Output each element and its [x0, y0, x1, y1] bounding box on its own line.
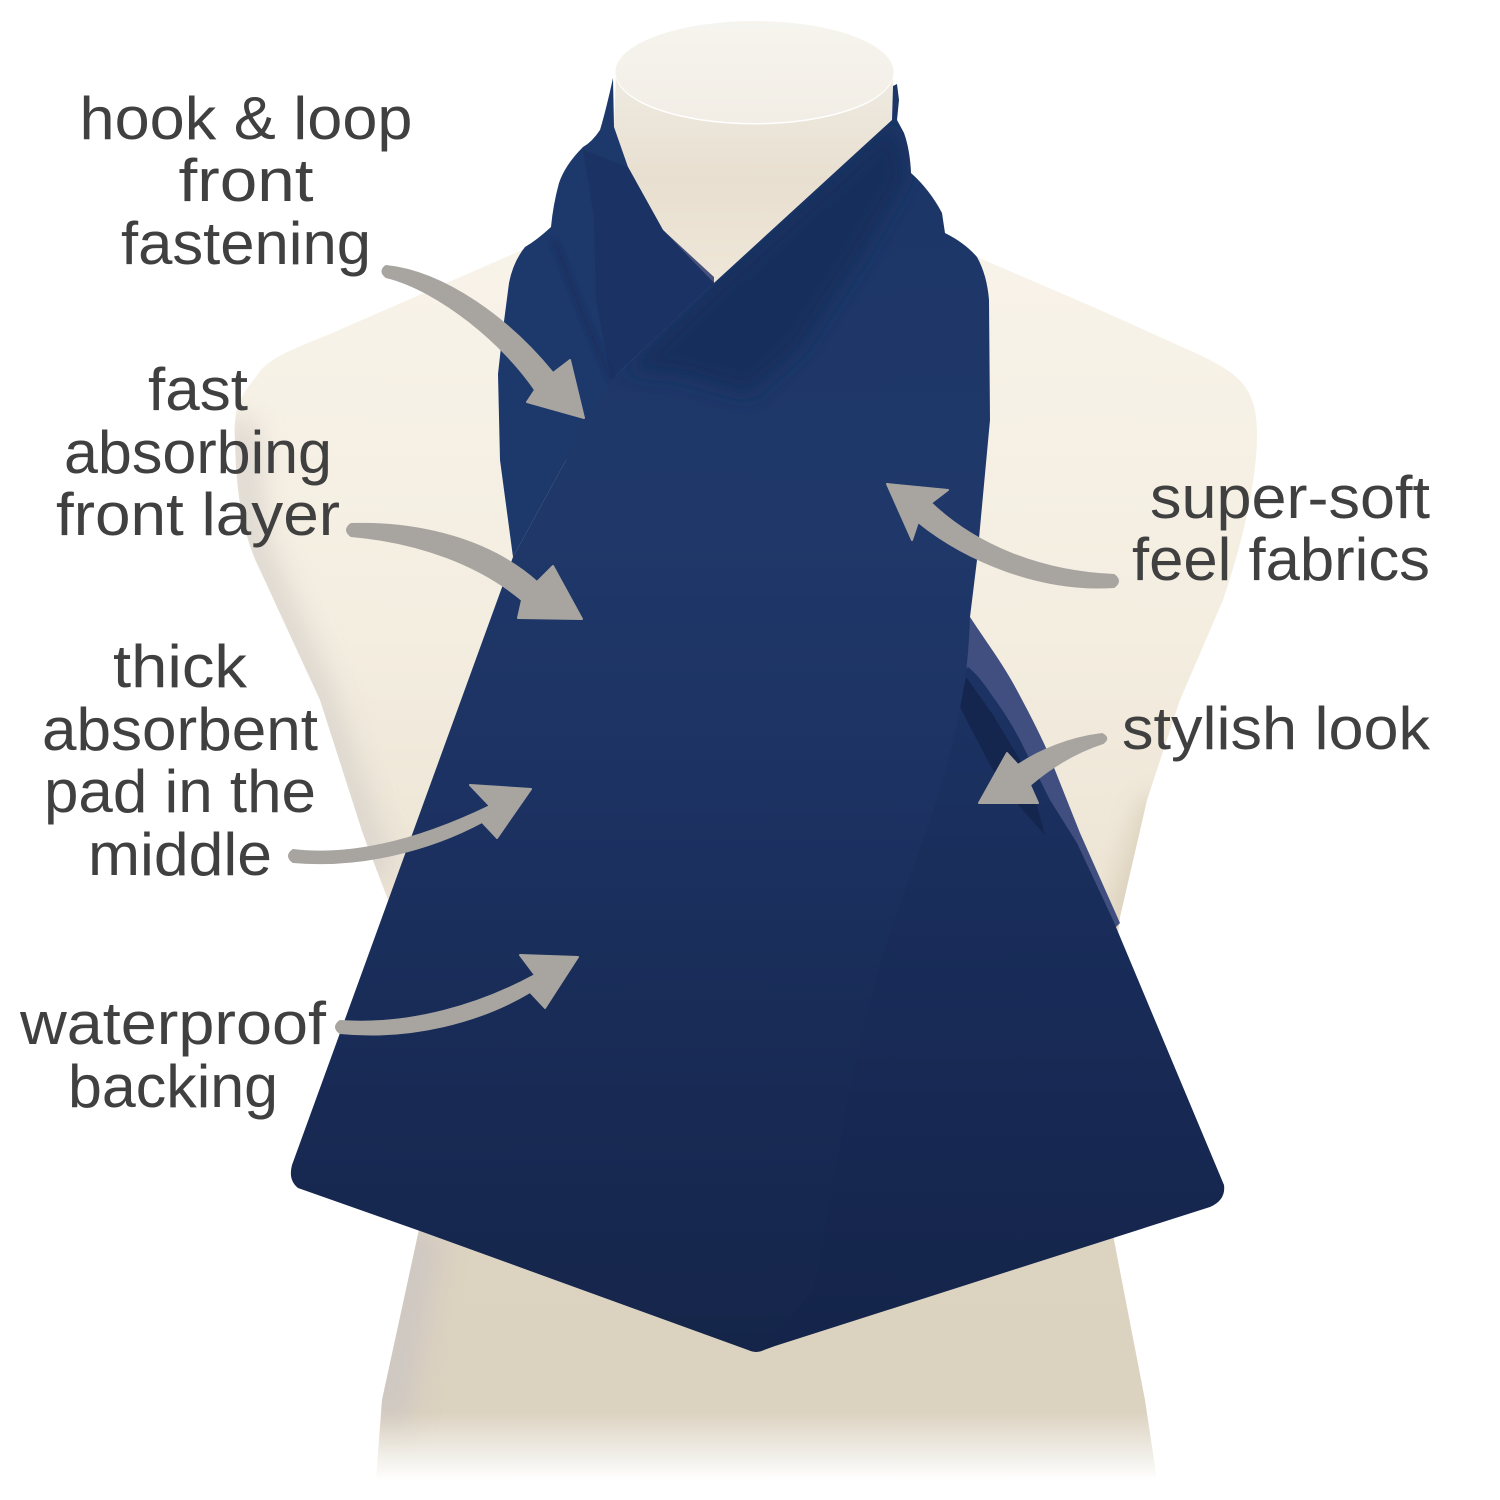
label: hook and loop front fastening: fastening — [121, 210, 371, 277]
arrow: front layer — [347, 524, 582, 619]
label: hook and loop front fastening: hook & loop — [80, 85, 412, 152]
arrow: stylish look — [979, 734, 1106, 803]
label: waterproof backing — [19, 990, 326, 1120]
arrow: waterproof — [336, 955, 578, 1035]
label: waterproof backing: waterproof — [19, 990, 326, 1057]
scarf lining — [655, 230, 1120, 930]
label: fast absorbing front layer — [56, 356, 340, 548]
label: hook and loop front fastening — [80, 85, 412, 277]
arrow: absorbent pad — [289, 785, 531, 863]
label: fast absorbing front layer: absorbing — [64, 419, 332, 486]
label: thick absorbent pad in the middle: middle — [88, 821, 272, 888]
scarf back right panel — [764, 667, 1224, 1350]
label: super-soft feel fabrics: feel fabrics — [1132, 526, 1430, 593]
label: stylish look: stylish look — [1122, 695, 1431, 762]
label: thick absorbent pad in the middle: pad in the — [44, 758, 316, 825]
label: hook and loop front fastening: front — [178, 147, 314, 214]
label: fast absorbing front layer: fast — [148, 356, 248, 423]
label: super-soft feel fabrics — [1132, 464, 1430, 593]
scarf front panel — [291, 84, 990, 1352]
label: thick absorbent pad in the middle — [42, 633, 318, 888]
label: thick absorbent pad in the middle: thick — [113, 633, 248, 700]
label: super-soft feel fabrics: super-soft — [1150, 464, 1430, 531]
arrow: super-soft — [887, 484, 1118, 588]
label: fast absorbing front layer: front layer — [56, 481, 340, 548]
arrow: hook and loop — [382, 266, 584, 418]
label: waterproof backing: backing — [68, 1053, 278, 1120]
scarf back left collar panel — [498, 78, 714, 557]
label: thick absorbent pad in the middle: absorbent — [42, 696, 318, 763]
mannequin — [235, 21, 1257, 1480]
